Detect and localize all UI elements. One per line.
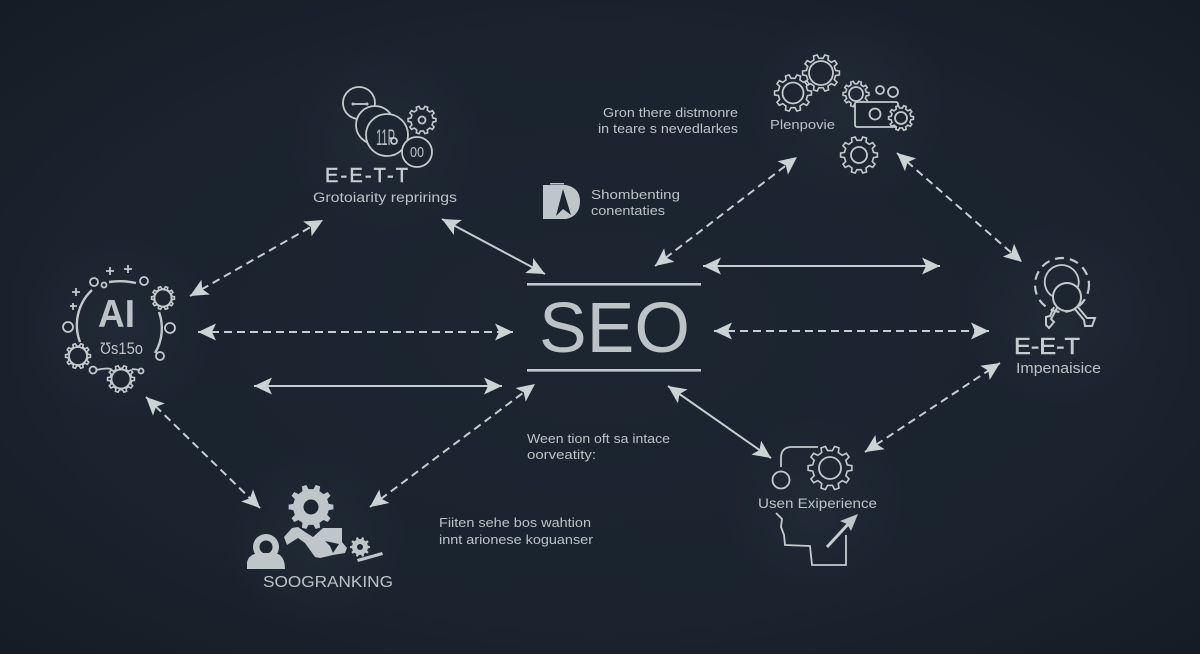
icon: target with arrows: [1035, 258, 1095, 328]
text block: top centre: Gron there distmonre: [603, 105, 738, 120]
text block: Shombenting: [591, 187, 680, 218]
arrow: SEO to user experience: [668, 386, 771, 458]
icon: E-E-T-T overlapping circles: 11P: [376, 125, 395, 150]
text: E-E-T-T caption: Grotoiarity reprirings: [313, 190, 457, 205]
text: E-E-T caption: Impenaisice: [1016, 361, 1101, 377]
icon: E-E-T-T overlapping circles: 00: [410, 144, 424, 161]
text block: lower centre: innt arionese koguanser: [439, 532, 594, 547]
text block: top centre: in teare s nevedlarkes: [598, 121, 739, 136]
arrow: E-E-T-T to SEO: [442, 219, 545, 274]
label: AI sub text: Ʊs15o: [100, 339, 143, 358]
text block: middle centre: oorveatity:: [527, 447, 596, 462]
text block: top centre: [598, 105, 739, 136]
icon: user experience head and gear: [772, 446, 858, 565]
arrow: ranking to SEO: [370, 384, 535, 507]
arrow: upper solid right of SEO: [703, 265, 940, 267]
heading: E-E-T: E-E-T: [1014, 333, 1080, 359]
heading: E-E-T-T: E-E-T-T: [325, 165, 408, 187]
arrow: SEO to E-E-T dashed: [714, 330, 989, 332]
arrow: AI to E-E-T-T: [190, 220, 323, 296]
arrow: AI to SEO dashed: [198, 331, 513, 333]
arrow: SEO to process gears: [655, 157, 797, 266]
arrow: user experience to E-E-T: [865, 363, 1000, 452]
label: AI: AI: [98, 293, 135, 336]
icon: AI ring: [63, 265, 175, 392]
text block: lower centre: Fiiten sehe bos wahtion: [439, 515, 591, 530]
text block: Shombenting: Shombenting: [591, 187, 680, 202]
text block: lower centre: [439, 515, 594, 547]
arrow: process gears to E-E-T: [897, 153, 1022, 262]
icon: E-E-T-T overlapping circles: [343, 87, 436, 167]
label: SOOGRANKING: SOOGRANKING: [263, 574, 393, 591]
text block: middle centre: [527, 431, 670, 462]
arrow: AI to ranking: [146, 397, 260, 508]
label: user experience: Usen Exiperience: [758, 495, 877, 511]
label: Plenpovie: Plenpovie: [770, 117, 835, 132]
text block: Shombenting: conentaties: [591, 203, 666, 218]
text block: middle centre: Ween tion oft sa intace: [527, 431, 670, 446]
arrow: AI to SEO solid: [254, 385, 502, 387]
SEO central title: SEO: [539, 289, 690, 368]
icon: process gears: [775, 55, 913, 173]
icon: ranking filled gears and person: [247, 485, 383, 569]
icon: document with arrow: [543, 183, 580, 219]
